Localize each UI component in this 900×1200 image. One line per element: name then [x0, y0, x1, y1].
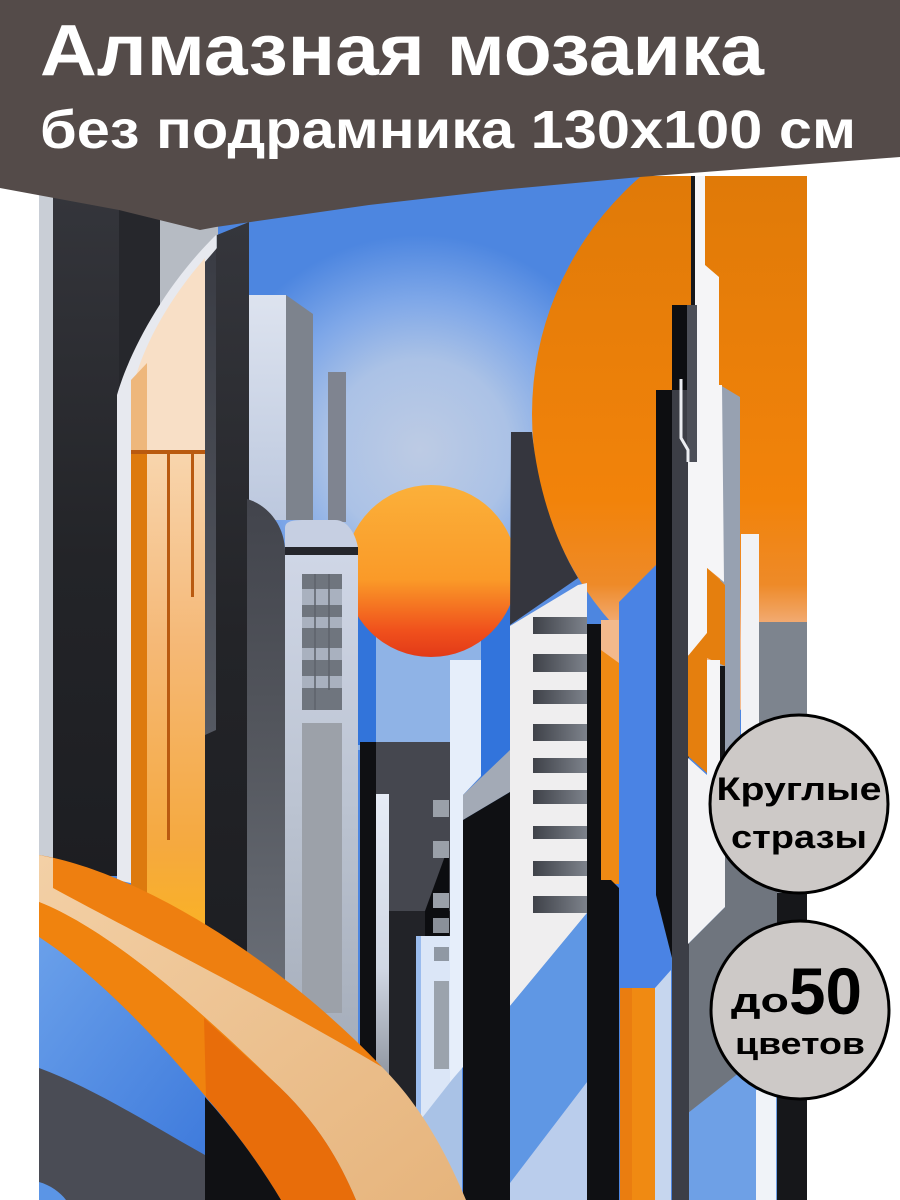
subtitle: без подрамника 130х100 см	[40, 100, 856, 160]
title: Алмазная мозаика	[40, 11, 765, 91]
badge: up to 50 colours: до	[731, 982, 789, 1020]
badge: up to 50 colours: цветов	[735, 1026, 865, 1061]
painting: abstract city skyline	[39, 176, 807, 1200]
dark central-left tower	[205, 222, 249, 980]
badge: up to 50 colours: 50	[789, 954, 862, 1028]
pale tower	[249, 295, 346, 522]
setting sun	[345, 485, 517, 657]
curved peach tower	[117, 235, 216, 934]
badge: round rhinestones: стразы	[731, 819, 867, 855]
band: lower orange	[39, 902, 356, 1200]
dark round-shoulder tower	[247, 499, 285, 1010]
band: blue	[39, 937, 205, 1155]
black wedge	[205, 1097, 281, 1200]
black tower and white striped tower	[463, 432, 619, 1200]
pale blue front tower	[416, 660, 481, 1200]
blue and orange right column	[619, 565, 671, 1200]
band: dark lower left	[39, 1068, 205, 1200]
sky below sun	[358, 605, 510, 778]
band: peach	[39, 855, 466, 1200]
badge: round rhinestones: Круглые	[716, 771, 882, 807]
left towers	[39, 176, 218, 876]
foreground curved bands	[39, 855, 466, 1200]
big orange circle	[532, 176, 807, 710]
mid dark building	[360, 742, 450, 1111]
band: upper orange arc	[39, 855, 382, 1100]
badge: up to 50 colours	[711, 921, 889, 1099]
tall black spire	[656, 176, 695, 1200]
sky	[39, 176, 807, 1200]
grey and white right blocks	[688, 385, 807, 1200]
grey tower with window grid	[285, 520, 358, 1045]
badge: round rhinestones	[710, 715, 888, 893]
white spire	[681, 176, 725, 944]
header banner	[0, 0, 900, 230]
